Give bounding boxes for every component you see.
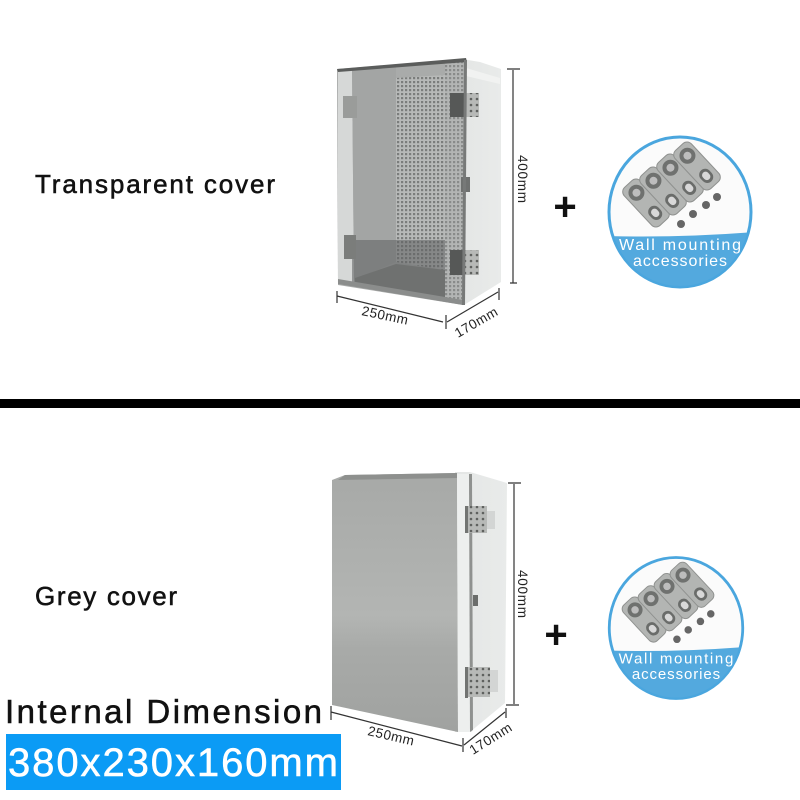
product: grey cover box	[331, 472, 530, 758]
dimension arrows	[337, 69, 520, 329]
box side wall	[462, 59, 501, 305]
divider bar	[0, 399, 800, 408]
heading: internal dimension: Internal Dimension	[5, 693, 322, 730]
product: transparent cover box: 250mm	[360, 303, 409, 328]
accessories badge 2	[606, 558, 747, 711]
product: grey cover box: 170mm	[467, 720, 514, 758]
title: grey cover: Grey cover	[35, 581, 177, 611]
hinges and latch	[343, 96, 357, 118]
product: transparent cover box: 170mm	[452, 304, 500, 341]
accessories badge 1: Wall mounting	[619, 237, 741, 254]
dimension labels: 400mm	[515, 155, 530, 203]
dimension value highlight: 380x230x160mm	[8, 741, 338, 785]
perforated back plate	[396, 75, 445, 270]
accessories badge 2: accessories	[632, 666, 720, 683]
dimension labels: 400mm	[515, 570, 530, 618]
plus sign 2: +	[544, 613, 568, 657]
hinges and latch	[467, 506, 487, 533]
accessories badge 1: accessories	[633, 253, 727, 270]
product: grey cover box: 250mm	[366, 723, 415, 748]
transparent front panel	[337, 59, 466, 305]
title: transparent cover: Transparent cover	[35, 169, 275, 199]
dimension arrows	[331, 483, 521, 752]
plus sign 1: +	[553, 185, 577, 229]
accessories badge 1	[605, 137, 755, 300]
box floor shadow	[352, 240, 445, 301]
box side wall	[455, 472, 507, 732]
grey front panel	[332, 473, 458, 732]
product: transparent cover box	[337, 58, 530, 341]
accessories badge 2: Wall mounting	[619, 651, 733, 668]
